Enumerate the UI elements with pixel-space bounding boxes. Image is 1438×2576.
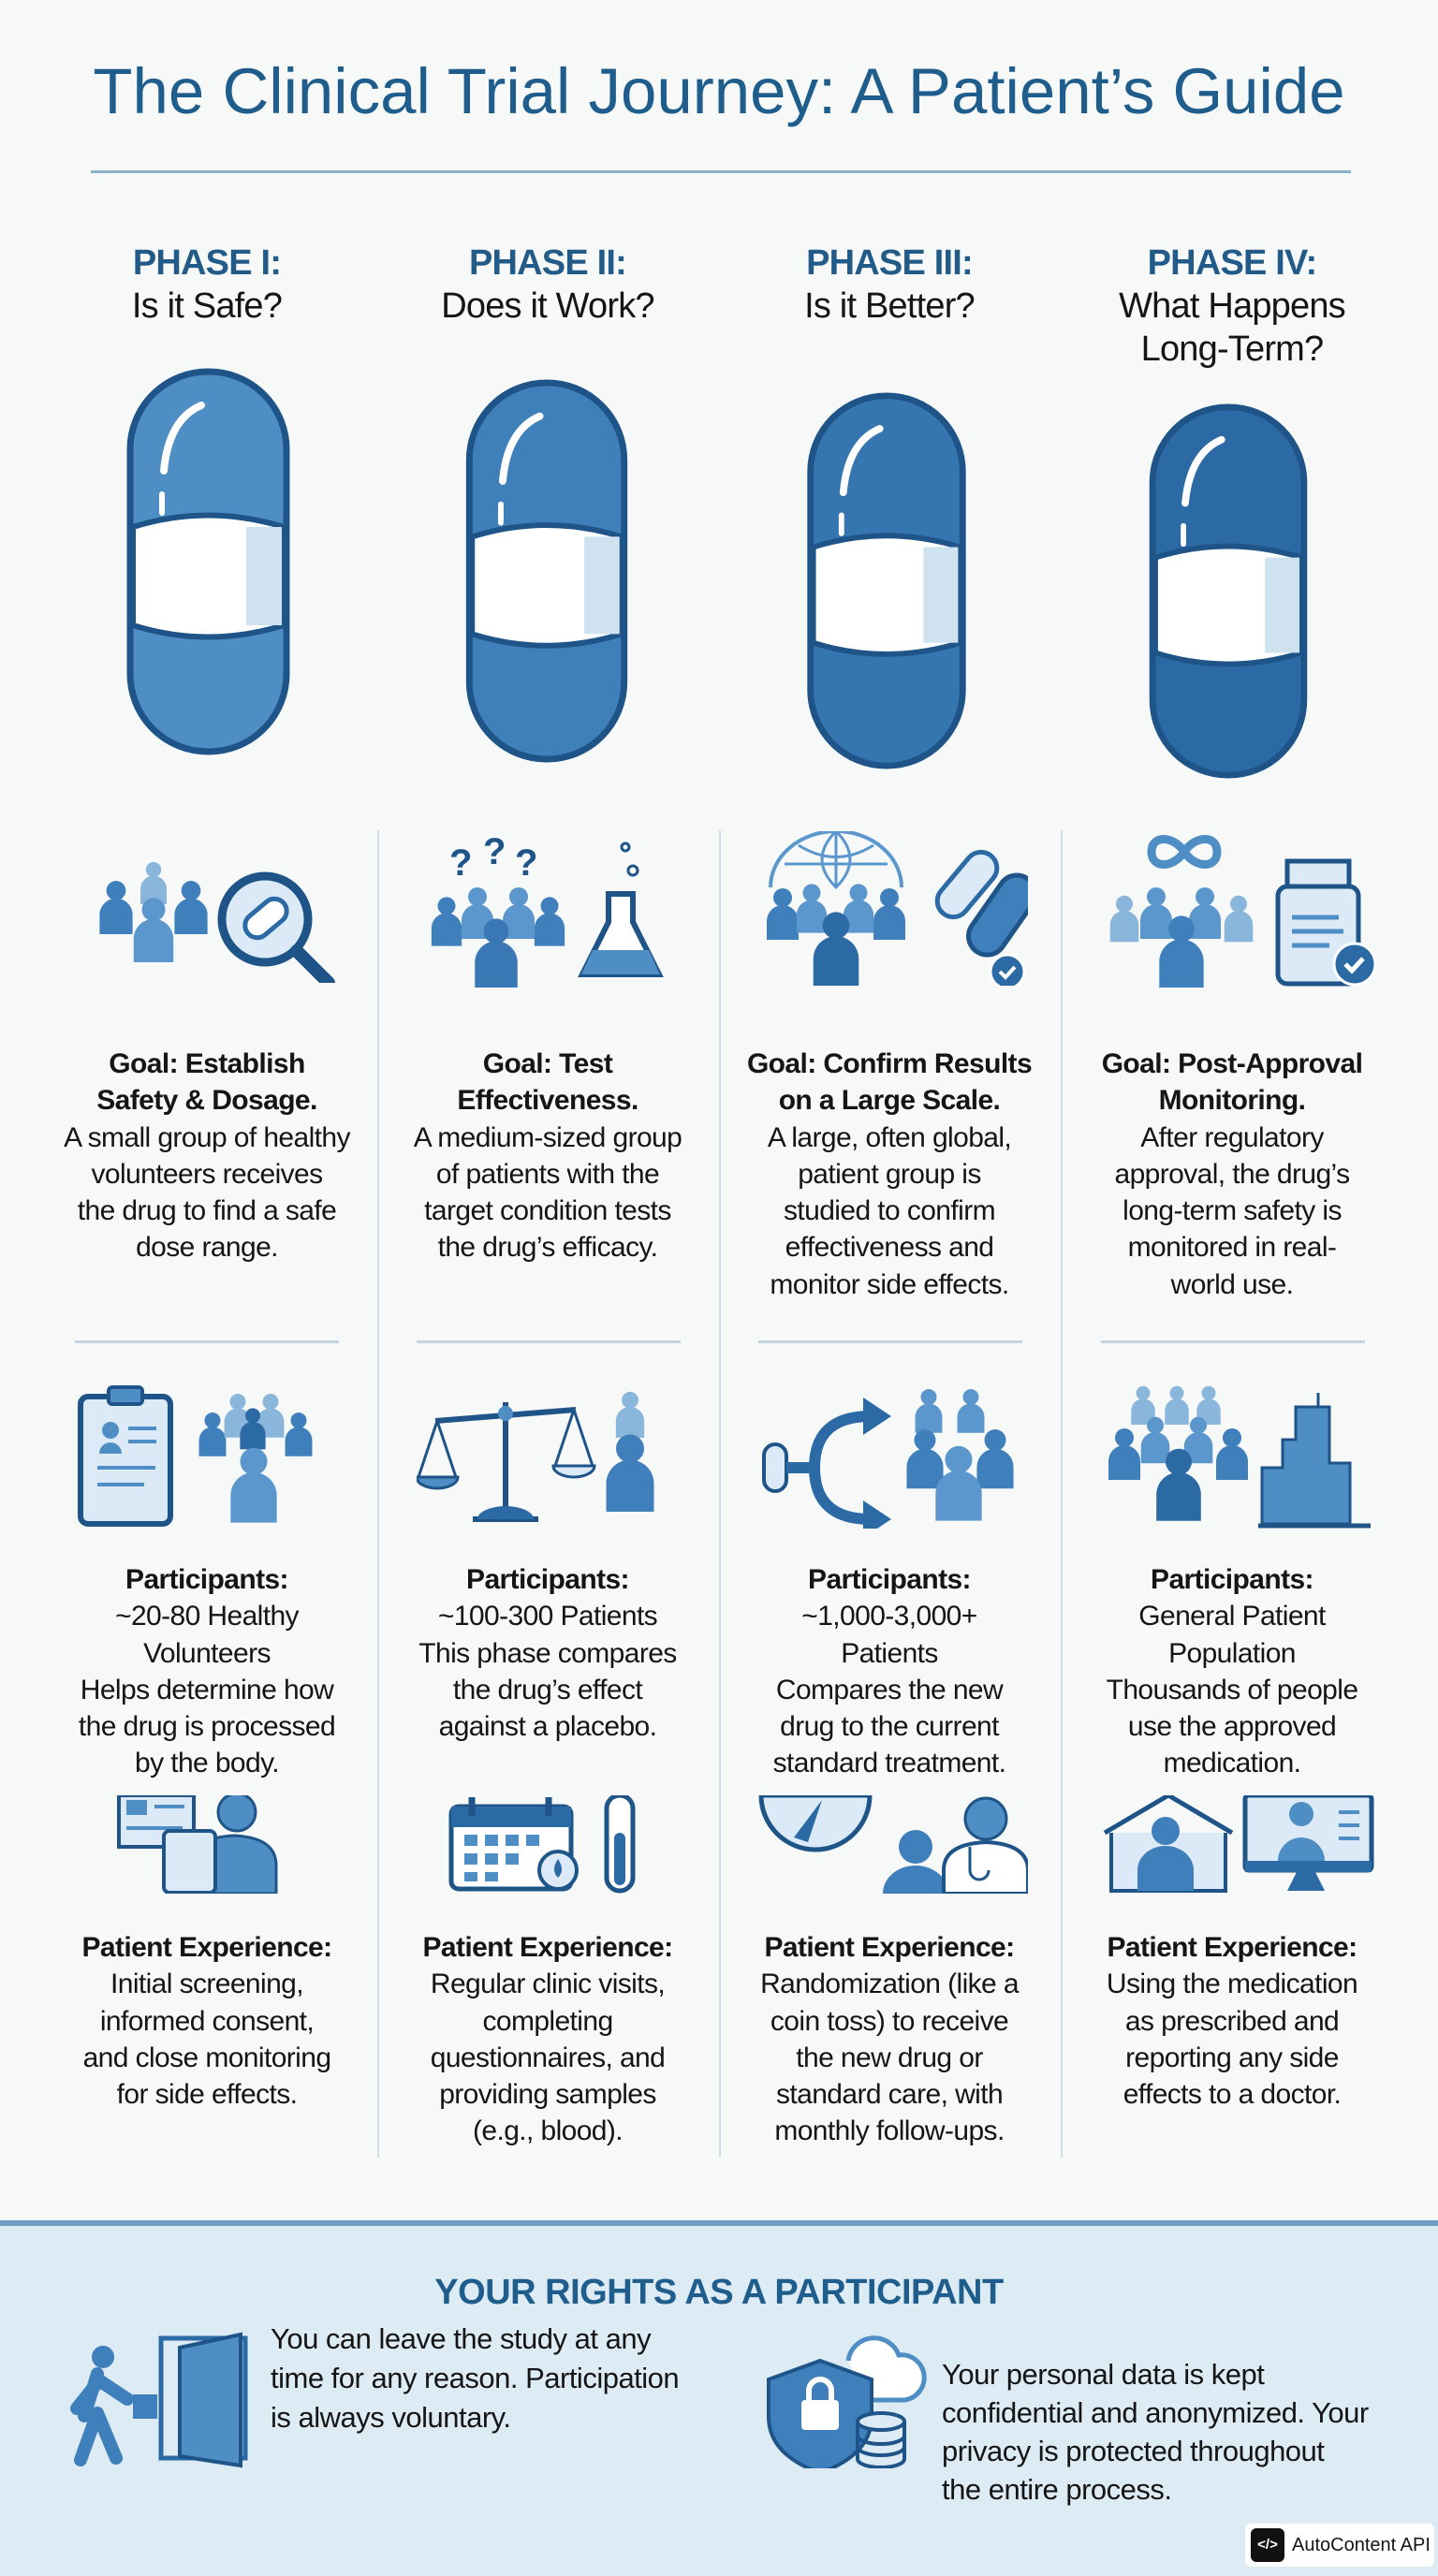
icon: global crowd + pills [767,831,1028,986]
participants text: phase I: by the body. [135,1748,279,1778]
icon: population + city [1108,1385,1371,1528]
phase heading: IV: PHASE IV: [1148,243,1316,283]
icon: clipboard + group [78,1385,313,1527]
patient experience: phase IV: Using the medication [1107,1969,1357,1999]
goal text: phase IV: long-term safety is [1123,1195,1342,1226]
goal text: phase II: the drug’s efficacy. [438,1232,657,1263]
phase heading: III: PHASE III: [806,243,973,283]
patient experience: phase III: Patient Experience: [764,1932,1015,1963]
icon: home + telehealth [1103,1795,1374,1893]
icon: scale + person [417,1391,653,1522]
pill: phase IV [1150,404,1307,779]
patient experience: phase I: Patient Experience: [81,1932,332,1963]
participants text: phase I [79,1564,335,1778]
patient experience: phase IV: reporting any side [1125,2042,1339,2073]
patient experience: phase II: providing samples [439,2079,656,2110]
goal text: phase IV: Monitoring. [1159,1085,1305,1116]
text: leave study: is always voluntary. [271,2401,510,2434]
goal text: phase I [64,1048,350,1263]
goal text: phase II: A medium-sized group [414,1122,682,1153]
rights heading: YOUR RIGHTS AS A PARTICIPANT [434,2273,1004,2312]
goal text: phase II: Goal: Test [483,1048,612,1079]
patient experience: phase III [760,1932,1020,2146]
icon: question crowd + flask: ? [449,842,472,884]
goal text: phase III [747,1048,1032,1300]
phase heading: IV: What Happens [1119,286,1345,326]
goal text: phase IV: monitored in real- [1128,1232,1336,1263]
badge: AutoContent API: AutoContent API [1292,2535,1431,2555]
goal text: phase II: of patients with the [436,1159,659,1190]
patient experience: phase III: Randomization (like a [760,1969,1019,1999]
goal text: phase IV: approval, the drug’s [1115,1159,1349,1190]
icon: branching arrows + group [762,1389,1014,1529]
participants text: phase IV: use the approved [1128,1711,1336,1742]
goal text: phase III: A large, often global, [768,1122,1011,1153]
goal text: phase III: Goal: Confirm Results [747,1048,1032,1079]
participants text: phase I: Helps determine how [81,1675,333,1705]
icon: person leaving door [70,2333,247,2467]
phase heading: IV [1119,243,1345,369]
panel: rights [0,2220,1438,2576]
participants text: phase IV: medication. [1164,1748,1300,1778]
goal text: phase I: A small group of healthy [64,1122,350,1153]
participants text: phase III: drug to the current [780,1711,999,1742]
patient experience: phase II: Patient Experience: [422,1932,673,1963]
participants text: phase I: ~20-80 Healthy [115,1601,299,1632]
patient experience: phase IV: as prescribed and [1125,2006,1339,2037]
patient experience: phase I: and close monitoring [83,2042,330,2073]
text: leave study [271,2322,679,2434]
patient experience: phase I [81,1932,332,2110]
goal text: phase IV: After regulatory [1140,1122,1324,1153]
pill: phase III [807,393,966,769]
badge: AutoContent API: </> [1257,2537,1278,2553]
goal text: phase III: effectiveness and [785,1232,993,1263]
text: privacy: confidential and anonymized. Your [942,2396,1369,2429]
patient experience: phase II: (e.g., blood). [473,2115,623,2146]
participants text: phase II: Participants: [466,1564,629,1595]
title: The Clinical Trial Journey: A Patient’s Guide [93,55,1345,127]
patient experience: phase III: standard care, with [776,2079,1003,2110]
goal text: phase IV [1102,1048,1362,1300]
participants text: phase II [418,1564,677,1742]
pill: phase II [466,380,627,762]
goal text: phase I: dose range. [136,1232,278,1263]
icon: screening form + nurse [117,1795,277,1894]
goal text: phase II: Effectiveness. [457,1085,638,1116]
participants text: phase IV: Thousands of people [1107,1675,1357,1705]
text: privacy [942,2358,1369,2506]
participants text: phase III: Patients [841,1638,938,1669]
phase heading: II [441,243,654,326]
phase heading: IV: Long-Term? [1141,329,1323,369]
participants text: phase III: standard treatment. [773,1748,1005,1778]
patient experience: phase II: completing [482,2006,613,2037]
patient experience: phase IV [1107,1932,1357,2110]
goal text: phase I: Goal: Establish [109,1048,305,1079]
participants text: phase I: Participants: [125,1564,288,1595]
participants text: phase III: Participants: [808,1564,971,1595]
participants text: phase III: ~1,000-3,000+ [801,1601,977,1632]
goal text: phase II [414,1048,682,1263]
icon: question crowd + flask: ? [483,831,506,872]
patient experience: phase II: Regular clinic visits, [431,1969,665,1999]
goal text: phase I: the drug to find a safe [78,1195,336,1226]
phase heading: II: Does it Work? [441,286,654,326]
phase heading: I: Is it Safe? [132,286,282,326]
goal text: phase III: patient group is [798,1159,981,1190]
participants text: phase III [773,1564,1005,1778]
goal text: phase III: studied to confirm [784,1195,995,1226]
goal text: phase II: target condition tests [424,1195,671,1226]
icon: infinity crowd + bottle [1110,835,1374,988]
participants text: phase IV: Participants: [1151,1564,1313,1595]
patient experience: phase I: for side effects. [117,2079,297,2110]
icon: small group + magnifier [99,861,335,983]
participants text: phase II: This phase compares [418,1638,677,1669]
text: privacy: the entire process. [942,2473,1172,2506]
goal text: phase IV: Goal: Post-Approval [1102,1048,1362,1079]
participants text: phase II: the drug’s effect [453,1675,642,1705]
phase heading: III [804,243,975,326]
participants text: phase III: Compares the new [776,1675,1003,1705]
patient experience: phase III: monthly follow-ups. [774,2115,1005,2146]
text: privacy: privacy is protected throughout [942,2435,1324,2467]
phase heading: I: PHASE I: [133,243,281,283]
goal text: phase III: monitor side effects. [770,1269,1009,1300]
patient experience: phase I: Initial screening, [110,1969,303,1999]
patient experience: phase II [422,1932,673,2146]
text: leave study: You can leave the study at any [271,2322,651,2355]
participants text: phase I: Volunteers [143,1638,271,1669]
icon: calendar + blood tube [449,1795,635,1893]
participants text: phase IV [1107,1564,1357,1778]
text: privacy: Your personal data is kept [942,2358,1264,2391]
goal text: phase IV: world use. [1171,1269,1293,1300]
icon: question crowd + flask: ? [515,842,537,884]
patient experience: phase IV: effects to a doctor. [1123,2079,1341,2110]
phase heading: II: PHASE II: [469,243,626,283]
icon: coin/compass + doctor [758,1795,1028,1894]
icon: shield cloud database [767,2335,927,2468]
patient experience: phase I: informed consent, [100,2006,314,2037]
participants text: phase II: ~100-300 Patients [438,1601,657,1632]
patient experience: phase III: the new drug or [796,2042,983,2073]
participants text: phase IV: General Patient [1138,1601,1326,1632]
participants text: phase II: against a placebo. [439,1711,656,1742]
goal text: phase III: on a Large Scale. [779,1085,1000,1116]
badge: AutoContent API [1245,2524,1434,2567]
patient experience: phase IV: Patient Experience: [1107,1932,1357,1963]
text: leave study: time for any reason. Participation [271,2362,679,2394]
participants text: phase I: the drug is processed [79,1711,335,1742]
phase heading: III: Is it Better? [804,286,975,326]
pill: phase I [127,369,290,754]
patient experience: phase III: coin toss) to receive [770,2006,1008,2037]
phase heading: I [132,243,282,326]
icon: question crowd + flask [431,831,664,988]
patient experience: phase II: questionnaires, and [431,2042,665,2073]
goal text: phase I: Safety & Dosage. [96,1085,317,1116]
participants text: phase IV: Population [1168,1638,1296,1669]
goal text: phase I: volunteers receives [91,1159,323,1190]
